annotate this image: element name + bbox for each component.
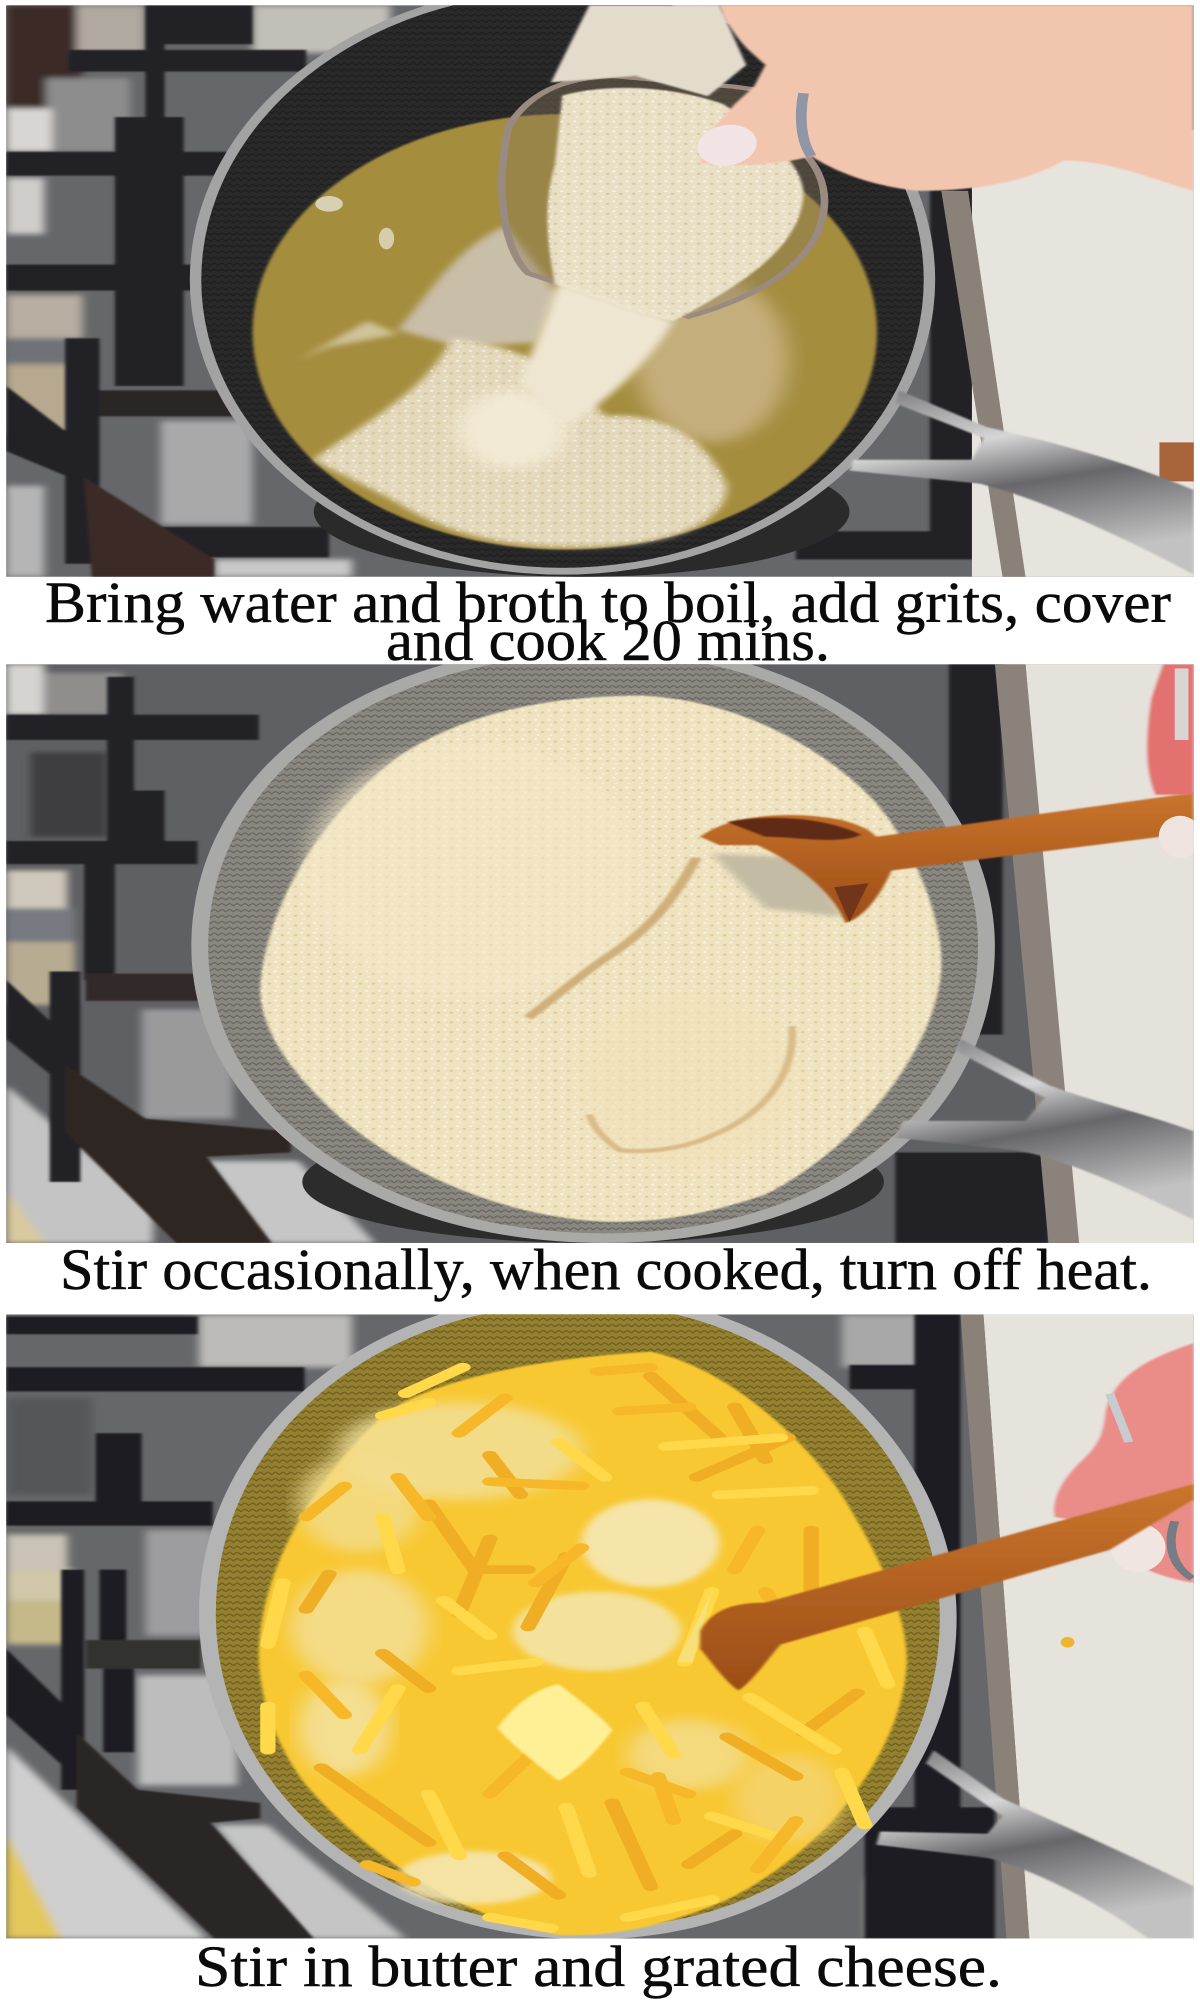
cooked grits xyxy=(260,696,941,1222)
photo: pouring grits into boiling broth xyxy=(6,0,1194,577)
caption: step 3: Stir in butter and grated cheese. xyxy=(195,1934,1002,1999)
saucepan xyxy=(199,1292,957,1939)
grits with shredded cheese xyxy=(259,1352,907,1935)
pan handle xyxy=(895,1039,1194,1220)
pan handle xyxy=(849,390,1194,575)
wooden spoon xyxy=(700,793,1194,923)
broth xyxy=(253,114,877,549)
caption: step 1: and cook 20 mins. xyxy=(386,608,830,673)
counter on the right xyxy=(960,1314,1194,1938)
saucepan xyxy=(191,643,995,1243)
hand holding spoon xyxy=(1054,1343,1194,1583)
caption: step 1: Bring water and broth to boil, add grits, cover xyxy=(45,570,1171,635)
counter on the right xyxy=(995,664,1194,1243)
cheese shreds xyxy=(268,1367,888,1928)
photo: stirring in butter and cheese xyxy=(6,1292,1194,1939)
grits settling in the broth xyxy=(314,338,727,547)
saucepan xyxy=(190,0,935,577)
photo: stirring the cooked grits xyxy=(6,643,1200,1243)
grits in the cup and falling xyxy=(520,88,804,425)
caption: step 2: Stir occasionally, when cooked, turn off heat. xyxy=(60,1237,1152,1302)
stove top and grates xyxy=(6,1314,1194,1938)
stove top and grates xyxy=(6,5,1194,577)
pan handle xyxy=(876,1750,1194,1938)
fingers xyxy=(1147,664,1200,858)
wooden spoon xyxy=(700,1484,1194,1691)
counter on the right xyxy=(941,130,1194,577)
measuring cup xyxy=(502,5,824,317)
hand xyxy=(689,5,1194,191)
stove top and grates xyxy=(6,664,1194,1243)
